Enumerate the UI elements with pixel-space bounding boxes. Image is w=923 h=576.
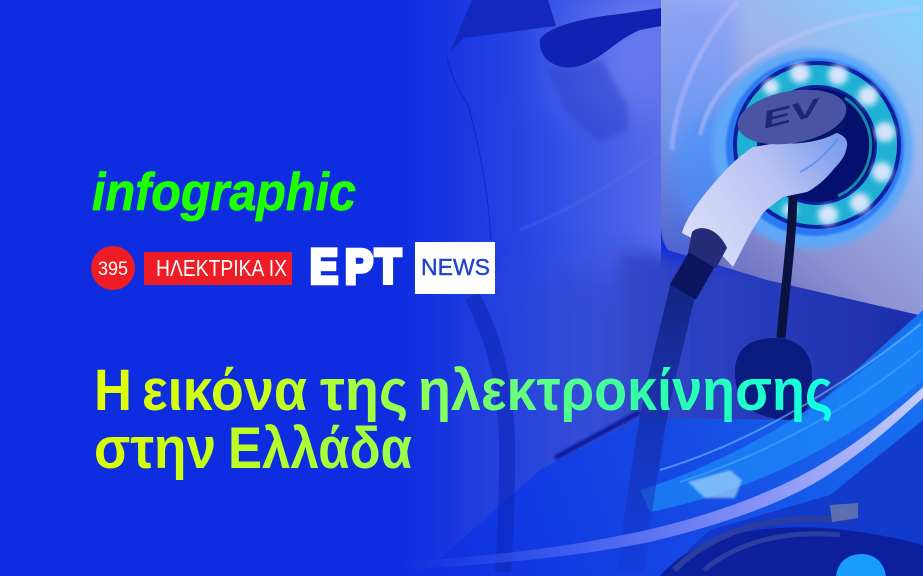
title: στην <box>94 416 216 481</box>
logo: ΕΡΤ: Ε <box>310 241 338 294</box>
photo: wall panel of charger <box>661 0 923 316</box>
badge: 395 <box>91 246 135 290</box>
logo: NEWS: NEWS <box>421 254 490 280</box>
logo: ΕΡΤ: Ρ <box>345 241 373 294</box>
photo: bright arc and lower detail <box>400 387 923 576</box>
plug cap with EV: EV <box>759 93 826 134</box>
badge: 395: 395 <box>98 259 128 280</box>
title: της <box>320 358 408 423</box>
car window <box>450 0 556 52</box>
logo: ΕΡΤ: Τ <box>375 241 401 294</box>
title: εικόνα <box>142 358 307 423</box>
photo: charging cable thin with cap <box>735 195 812 420</box>
LED ring <box>747 63 895 225</box>
photo: charger handle <box>682 82 851 267</box>
photo: under-wall shadow <box>620 250 923 500</box>
photo: thick cables <box>472 228 727 572</box>
title: Ελλάδα <box>228 416 412 481</box>
badge: ΗΛΕΚΤΡΙΚΑ ΙΧ: ΗΛΕΚΤΡΙΚΑ ΙΧ <box>156 255 287 281</box>
title: Η <box>94 358 132 423</box>
heading: infographic: infographic <box>92 163 356 222</box>
logo: ΕΡΤ <box>310 241 401 294</box>
photo: charging port with LED ring <box>713 49 913 249</box>
logo: NEWS <box>415 242 495 294</box>
car wing mirror <box>540 8 661 67</box>
badge: ΗΛΕΚΤΡΙΚΑ ΙΧ <box>144 252 292 285</box>
photo: glowing road <box>420 310 923 576</box>
title: ηλεκτροκίνησης <box>418 358 833 423</box>
title <box>94 358 833 481</box>
plug cap with EV <box>733 82 851 152</box>
photo: electric car body <box>438 0 661 560</box>
